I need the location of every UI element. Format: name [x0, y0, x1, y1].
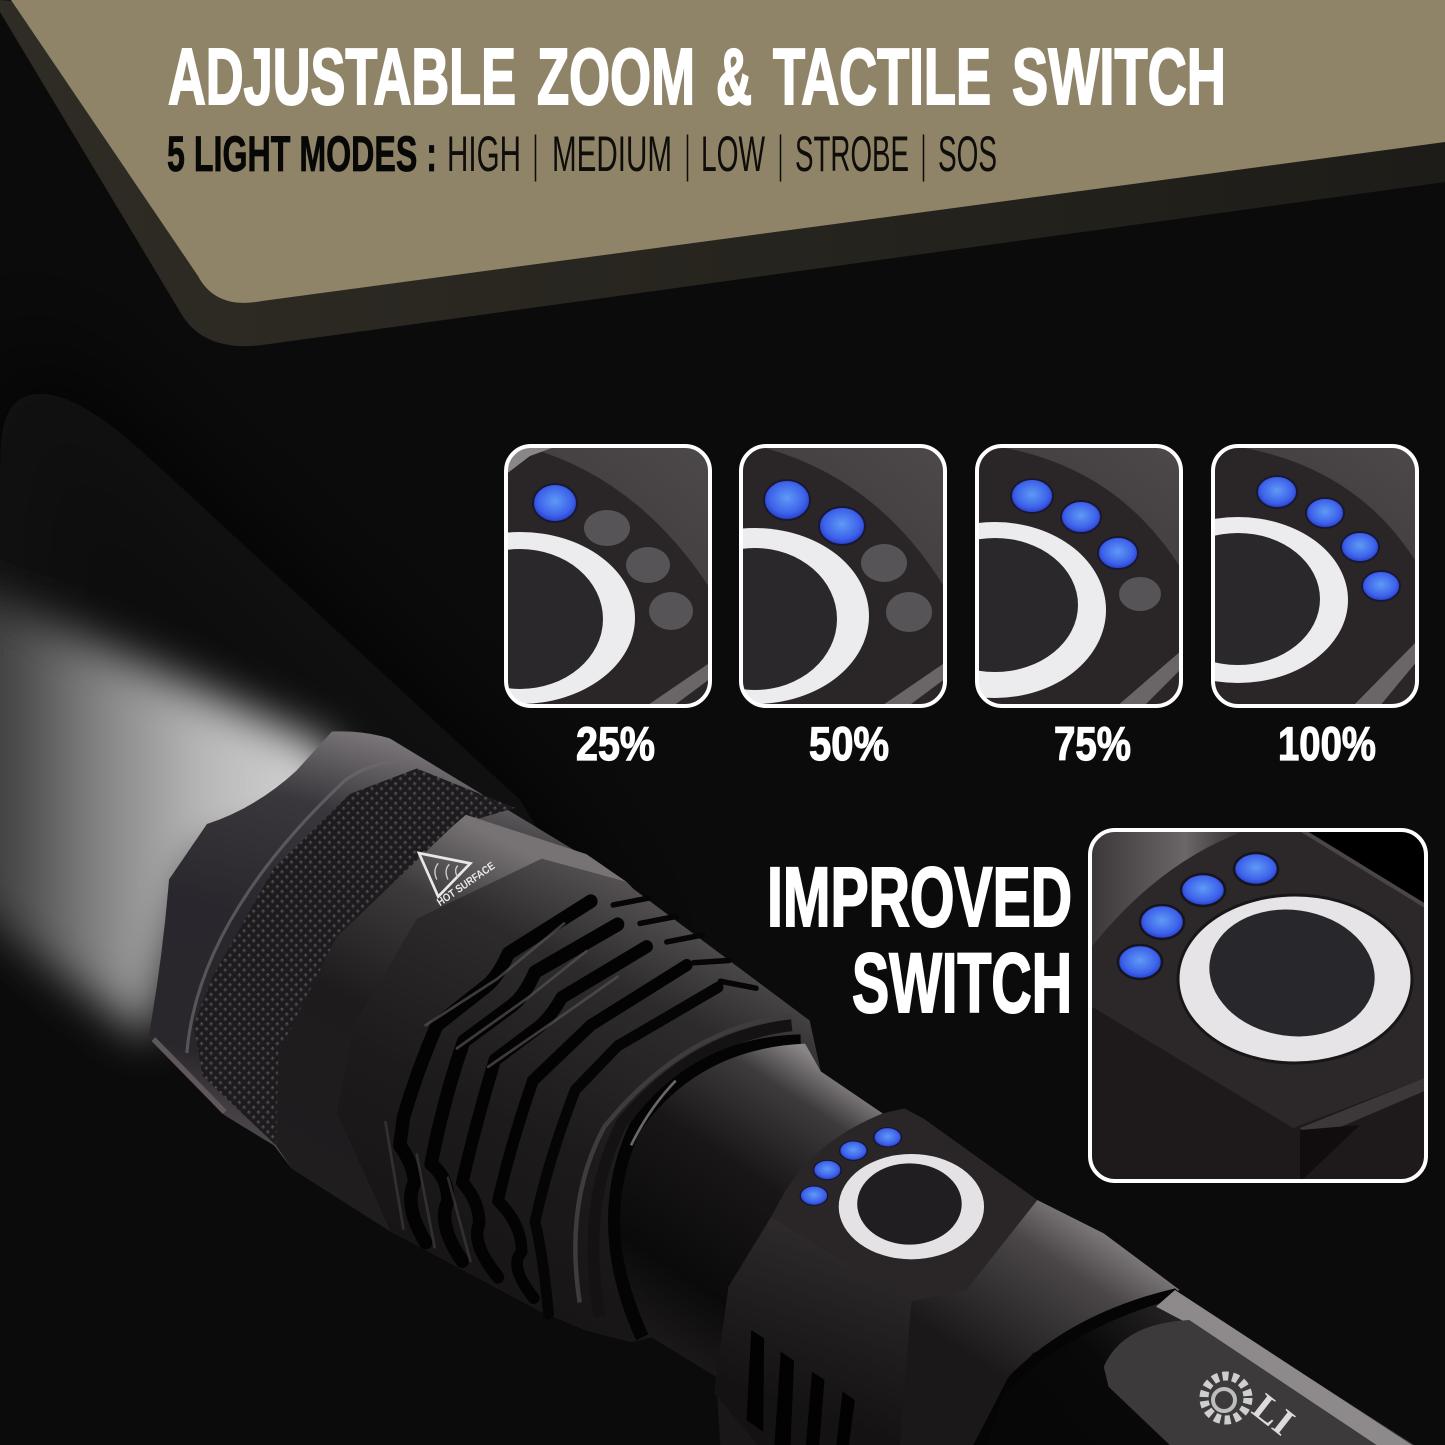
- grey upper left: [1092, 832, 1240, 946]
- button: [1209, 910, 1375, 1036]
- ring: [743, 528, 869, 704]
- subtitle: light modes: |: [533, 126, 538, 182]
- panel: improved switch close-up: [1089, 829, 1427, 1182]
- switch block top: [771, 1108, 1037, 1302]
- bezel lower rim highlight: [153, 1039, 225, 1112]
- brand logo on tube: [1204, 1376, 1302, 1444]
- LEDs: [1118, 853, 1278, 979]
- subtitle: light modes: STROBE: [795, 126, 909, 182]
- lower body with vents: [714, 1217, 985, 1445]
- ring: [1215, 517, 1348, 683]
- heading: improved switch: SWITCH: [852, 936, 1072, 1030]
- light beam: [0, 545, 335, 1040]
- title: ADJUSTABLE: [168, 32, 516, 121]
- label: 75%: 75%: [1054, 717, 1131, 770]
- panel: 75%: [975, 444, 1183, 708]
- heading: improved switch: [767, 850, 1072, 1030]
- switch ring: [839, 1154, 984, 1259]
- flashlight body with switch: [714, 1108, 1422, 1445]
- lower chamfer: [1089, 1005, 1427, 1182]
- title: TACTILE: [773, 32, 991, 121]
- subtitle: light modes: SOS: [938, 126, 997, 182]
- fin section: [336, 859, 821, 1342]
- button: [979, 538, 1078, 672]
- LEDs: [764, 480, 932, 632]
- flashlight head: [149, 731, 944, 1445]
- charging label patch: [1104, 1320, 1384, 1445]
- tube upper highlight: [1156, 1290, 1420, 1445]
- chamfer section: [900, 1200, 1180, 1445]
- subtitle: light modes: HIGH: [447, 126, 521, 182]
- subtitle: light modes: MEDIUM: [552, 126, 672, 182]
- smooth band: [276, 815, 627, 1231]
- panel: 50%: [739, 444, 947, 708]
- cooling grooves: [386, 898, 756, 1314]
- subtitle: light modes: |: [685, 126, 690, 182]
- panel: 100%: [1211, 444, 1419, 708]
- knurled grip: [194, 769, 515, 1145]
- barrel: [620, 1044, 944, 1445]
- banner shadow band: [0, 0, 1445, 346]
- title: SWITCH: [1012, 32, 1226, 121]
- bezel inner rim: [187, 762, 426, 1053]
- collar rings: [575, 1016, 801, 1337]
- vent slots: [747, 1330, 855, 1445]
- label: 25%: 25%: [576, 717, 655, 770]
- black corner: [1309, 832, 1424, 903]
- label: 50%: 50%: [809, 717, 889, 770]
- LEDs: [1011, 479, 1161, 611]
- tube: [985, 1297, 1422, 1445]
- ring: [979, 522, 1106, 698]
- indicator LEDs: [800, 1128, 901, 1205]
- subtitle: light modes: |: [921, 126, 926, 182]
- top banner: [11, 0, 1445, 303]
- button: [743, 548, 837, 690]
- LEDs: [1257, 476, 1400, 601]
- label: 100%: 100%: [1278, 717, 1376, 770]
- bezel silhouette: [149, 731, 821, 1342]
- title: [168, 32, 1226, 121]
- subtitle: light modes: [167, 126, 997, 182]
- ring: [508, 532, 635, 704]
- panel: 25%: [504, 444, 712, 708]
- heading: improved switch: IMPROVED: [767, 850, 1072, 944]
- subtitle: light modes: LOW: [701, 126, 765, 182]
- brand logo on tube: LI: [1244, 1386, 1302, 1444]
- black ring: [971, 1288, 1184, 1445]
- button: [1215, 533, 1320, 665]
- subtitle: light modes: 5 LIGHT MODES :: [167, 126, 437, 182]
- LEDs: [533, 484, 693, 630]
- ring: [1178, 895, 1412, 1063]
- title: &: [716, 32, 752, 121]
- button: [508, 549, 603, 689]
- title: ZOOM: [537, 32, 695, 121]
- subtitle: light modes: |: [778, 126, 783, 182]
- switch button: [857, 1163, 962, 1245]
- hot surface icon: HOT SURFACE: [435, 860, 497, 909]
